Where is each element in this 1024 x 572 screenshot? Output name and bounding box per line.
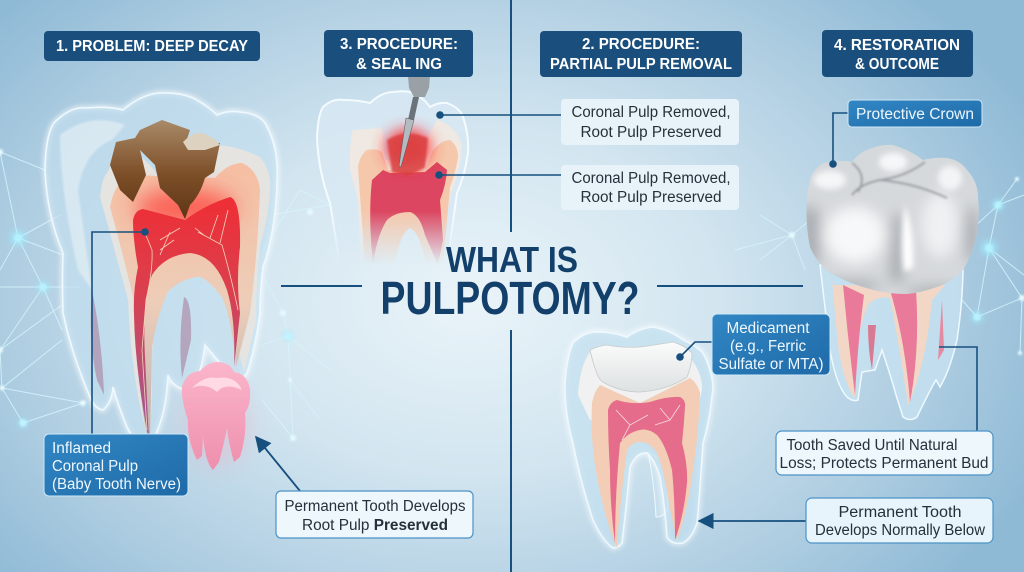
tooth 1 nerve branches bbox=[142, 210, 238, 430]
tooth 4 enamel bbox=[578, 352, 702, 420]
drill bur bbox=[399, 118, 414, 167]
callout: coronal pulp removed 2: Coronal Pulp Removed, bbox=[572, 170, 730, 187]
callout: tooth saved until natural loss bbox=[776, 347, 993, 475]
heading: 2. procedure partial pulp removal bbox=[540, 31, 742, 77]
tooth 4 medicament filling bbox=[590, 342, 692, 392]
tooth 3 right root canal bbox=[938, 300, 944, 360]
tooth 2 inner arch bbox=[396, 228, 424, 259]
heading: 4. restoration and outcome bbox=[822, 30, 973, 77]
heading: 3. procedure seal: & SEAL ING bbox=[356, 56, 442, 73]
title: PULPOTOMY? bbox=[380, 272, 640, 324]
title bbox=[380, 239, 640, 324]
callout: coronal pulp removed 1: Root Pulp Preserved bbox=[580, 124, 722, 141]
tooth 1 back roots bbox=[91, 290, 191, 395]
tooth 4 dentin bbox=[592, 378, 700, 548]
callout: tooth saved until natural loss: Loss; Protects Permanent Bud bbox=[780, 455, 988, 472]
tooth bud highlight bbox=[192, 377, 242, 392]
background network pattern bbox=[0, 149, 1024, 441]
callout: medicament bbox=[676, 314, 830, 375]
dental drill bbox=[399, 76, 430, 167]
callout: coronal pulp removed 1 bbox=[436, 99, 739, 145]
tooth 4 glass shell bbox=[565, 327, 713, 548]
callout: coronal pulp removed 2 bbox=[435, 165, 739, 210]
tooth 2 outer glass shell bbox=[317, 91, 468, 265]
heading: 1. problem bbox=[44, 31, 260, 61]
heading: 4. restoration and outcome: & OUTCOME bbox=[855, 56, 939, 73]
heading: 3. procedure seal bbox=[324, 30, 473, 77]
tooth 2 body fading below bbox=[317, 91, 468, 265]
tooth 2 cavity glow bbox=[384, 128, 432, 168]
tooth 4 pulp bbox=[608, 397, 687, 543]
title: WHAT IS bbox=[446, 239, 578, 280]
callout: medicament: (e.g., Ferric bbox=[730, 338, 806, 355]
callout: permanent tooth develops, root pulp preserved: Permanent Tooth Develops bbox=[284, 498, 466, 515]
drill shaft bbox=[408, 97, 419, 120]
tooth 3 silver crown bbox=[806, 144, 979, 294]
callout: medicament: Medicament bbox=[726, 320, 810, 337]
tooth 2 enamel bbox=[350, 120, 462, 246]
tooth bud glow bbox=[184, 383, 252, 467]
tooth 1 left cusp shading bbox=[60, 120, 125, 290]
tooth 3 glass roots bbox=[820, 265, 963, 420]
tooth 2 dentin bbox=[358, 140, 458, 265]
tooth 3 back root canal bbox=[868, 325, 876, 370]
callout: inflamed coronal pulp: Coronal Pulp bbox=[52, 458, 138, 475]
callout: tooth saved until natural loss: Tooth Saved Until Natural bbox=[786, 437, 958, 454]
tooth 4 back root bbox=[648, 452, 668, 517]
tooth 3: crown restoration bbox=[800, 140, 985, 420]
callout: inflamed coronal pulp: Inflamed bbox=[52, 440, 111, 457]
callout: permanent tooth develops normally below: Develops Normally Below bbox=[815, 522, 986, 539]
heading: 3. procedure seal: 3. PROCEDURE: bbox=[340, 36, 458, 53]
callout: inflamed coronal pulp bbox=[44, 228, 188, 496]
tooth 1 inflammation glow bbox=[135, 188, 235, 228]
tooth 2 open cavity bbox=[387, 133, 428, 176]
tooth 1 enamel fragment bbox=[183, 133, 220, 150]
tooth bud body bbox=[182, 362, 250, 470]
callout: coronal pulp removed 2: Root Pulp Preserved bbox=[580, 189, 722, 206]
heading: 2. procedure partial pulp removal: PARTIAL PULP REMOVAL bbox=[550, 56, 732, 73]
callout: permanent tooth develops normally below bbox=[699, 498, 993, 543]
callout: protective crown: Protective Crown bbox=[856, 106, 974, 123]
tooth 3 dentin roots bbox=[832, 280, 945, 405]
tooth 1 dentin bbox=[110, 163, 260, 443]
tooth 1 decay cavity bbox=[110, 120, 220, 219]
callout: medicament: Sulfate or MTA) bbox=[718, 356, 824, 373]
tooth 1: deep decay bbox=[45, 93, 277, 445]
callout: permanent tooth develops, root pulp preserved: Root Pulp Preserved bbox=[302, 517, 448, 534]
tooth 2: drilling procedure bbox=[317, 76, 468, 265]
heading: 2. procedure partial pulp removal: 2. PROCEDURE: bbox=[582, 36, 700, 53]
baby permanent tooth bud bbox=[182, 362, 252, 470]
tooth 1 enamel bbox=[100, 145, 270, 443]
tooth 3 pulp canals bbox=[843, 285, 917, 402]
callout: inflamed coronal pulp: (Baby Tooth Nerve) bbox=[52, 476, 181, 493]
center divider lines bbox=[281, 0, 803, 572]
heading: 1. problem: 1. PROBLEM: DEEP DECAY bbox=[56, 38, 249, 55]
callout: coronal pulp removed 1: Coronal Pulp Removed, bbox=[572, 104, 730, 121]
tooth 4: medicament placed bbox=[565, 327, 713, 548]
drill head bbox=[408, 76, 430, 97]
tooth 1 inflamed pulp bbox=[133, 197, 240, 441]
heading: 4. restoration and outcome: 4. RESTORATION bbox=[834, 37, 960, 54]
callout: permanent tooth develops, root pulp preserved bbox=[256, 437, 473, 538]
tooth 2 pulp bbox=[370, 162, 447, 265]
tooth 4 nerve branches bbox=[616, 405, 680, 440]
tooth 1 outer glass shell bbox=[45, 93, 277, 445]
callout: protective crown bbox=[829, 100, 982, 168]
callout: permanent tooth develops normally below: Permanent Tooth bbox=[838, 504, 962, 521]
